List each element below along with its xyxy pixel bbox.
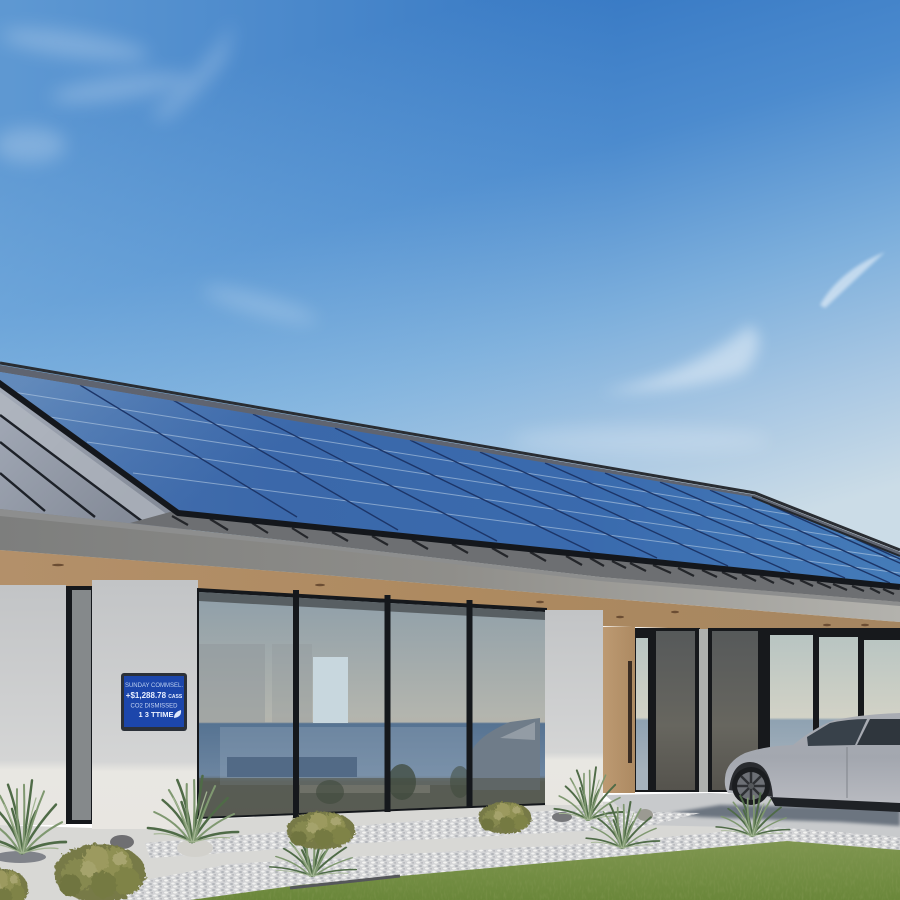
- wooden soffit: [0, 550, 900, 635]
- ground base: [0, 800, 900, 900]
- plant: by column: [148, 776, 238, 842]
- car body: [725, 713, 900, 803]
- wall-mounted energy display: [121, 673, 187, 731]
- cloud: upper left wisps: [0, 20, 235, 163]
- sky background: [0, 0, 900, 600]
- plant: lower path: [586, 802, 659, 848]
- roof: [0, 360, 900, 604]
- electric car: [725, 713, 900, 812]
- wall-mounted energy display: CO2 DISMISSED: [130, 704, 178, 710]
- column 3: [699, 629, 708, 792]
- window glass reflections: [199, 590, 545, 820]
- shrub: right: [478, 802, 532, 834]
- ridge gap: [0, 365, 900, 556]
- fascia: [0, 509, 900, 622]
- wood entrance door: [603, 627, 635, 793]
- door handle: [628, 661, 632, 763]
- cloud: low haze: [199, 280, 770, 454]
- gravel bed upper: [145, 810, 700, 858]
- wall-mounted energy display: SUNDAY COMMSEL.: [125, 683, 183, 689]
- metal gable roof: [0, 384, 190, 530]
- plant: front center: [270, 833, 356, 876]
- plant: far left: [0, 780, 66, 853]
- narrow window: [66, 586, 93, 824]
- clouds: [0, 20, 885, 454]
- soffit lights: [52, 564, 869, 626]
- wall-mounted energy display: 1 3 TTIME: [138, 710, 174, 719]
- gravel bed lower: [100, 827, 900, 900]
- leaf icon: [174, 710, 181, 718]
- panel cross lines: [13, 392, 900, 573]
- mullions: [296, 590, 470, 818]
- plant: by column 2: [554, 767, 623, 820]
- entrance glazing: [635, 628, 700, 792]
- hip second edge: [752, 497, 900, 556]
- car door seam: [846, 747, 848, 798]
- panel dividers: [80, 385, 900, 600]
- right glazing: [708, 628, 900, 792]
- ridge line: [0, 363, 900, 550]
- shrubs: [0, 802, 532, 900]
- shrub: center tan: [286, 812, 356, 849]
- solar panel array: [0, 372, 900, 584]
- large window wall: [197, 588, 547, 820]
- cloud: right streaks: [820, 252, 885, 308]
- driveway: [605, 793, 900, 838]
- spiky plants: [0, 767, 789, 876]
- wall column 2: [545, 610, 603, 805]
- wall column: [92, 580, 198, 829]
- wall-mounted energy display: +$1,288.78 CASS: [126, 691, 183, 700]
- wheel: [729, 762, 773, 805]
- lawn edging: [290, 876, 400, 888]
- cloud: fan: [600, 325, 759, 392]
- car shadow: [670, 805, 900, 826]
- plant: driveway: [716, 793, 789, 836]
- lawn: [190, 841, 900, 900]
- metal strip with seams: [130, 512, 900, 604]
- left wall: [0, 585, 66, 825]
- sky left glow: [0, 0, 620, 600]
- shrub: front left: [54, 844, 146, 900]
- car underside: [770, 797, 900, 812]
- rocks: [0, 809, 653, 863]
- black panel frame: [0, 380, 900, 587]
- car windows: [807, 719, 867, 746]
- shrub: bottom corner: [0, 869, 28, 900]
